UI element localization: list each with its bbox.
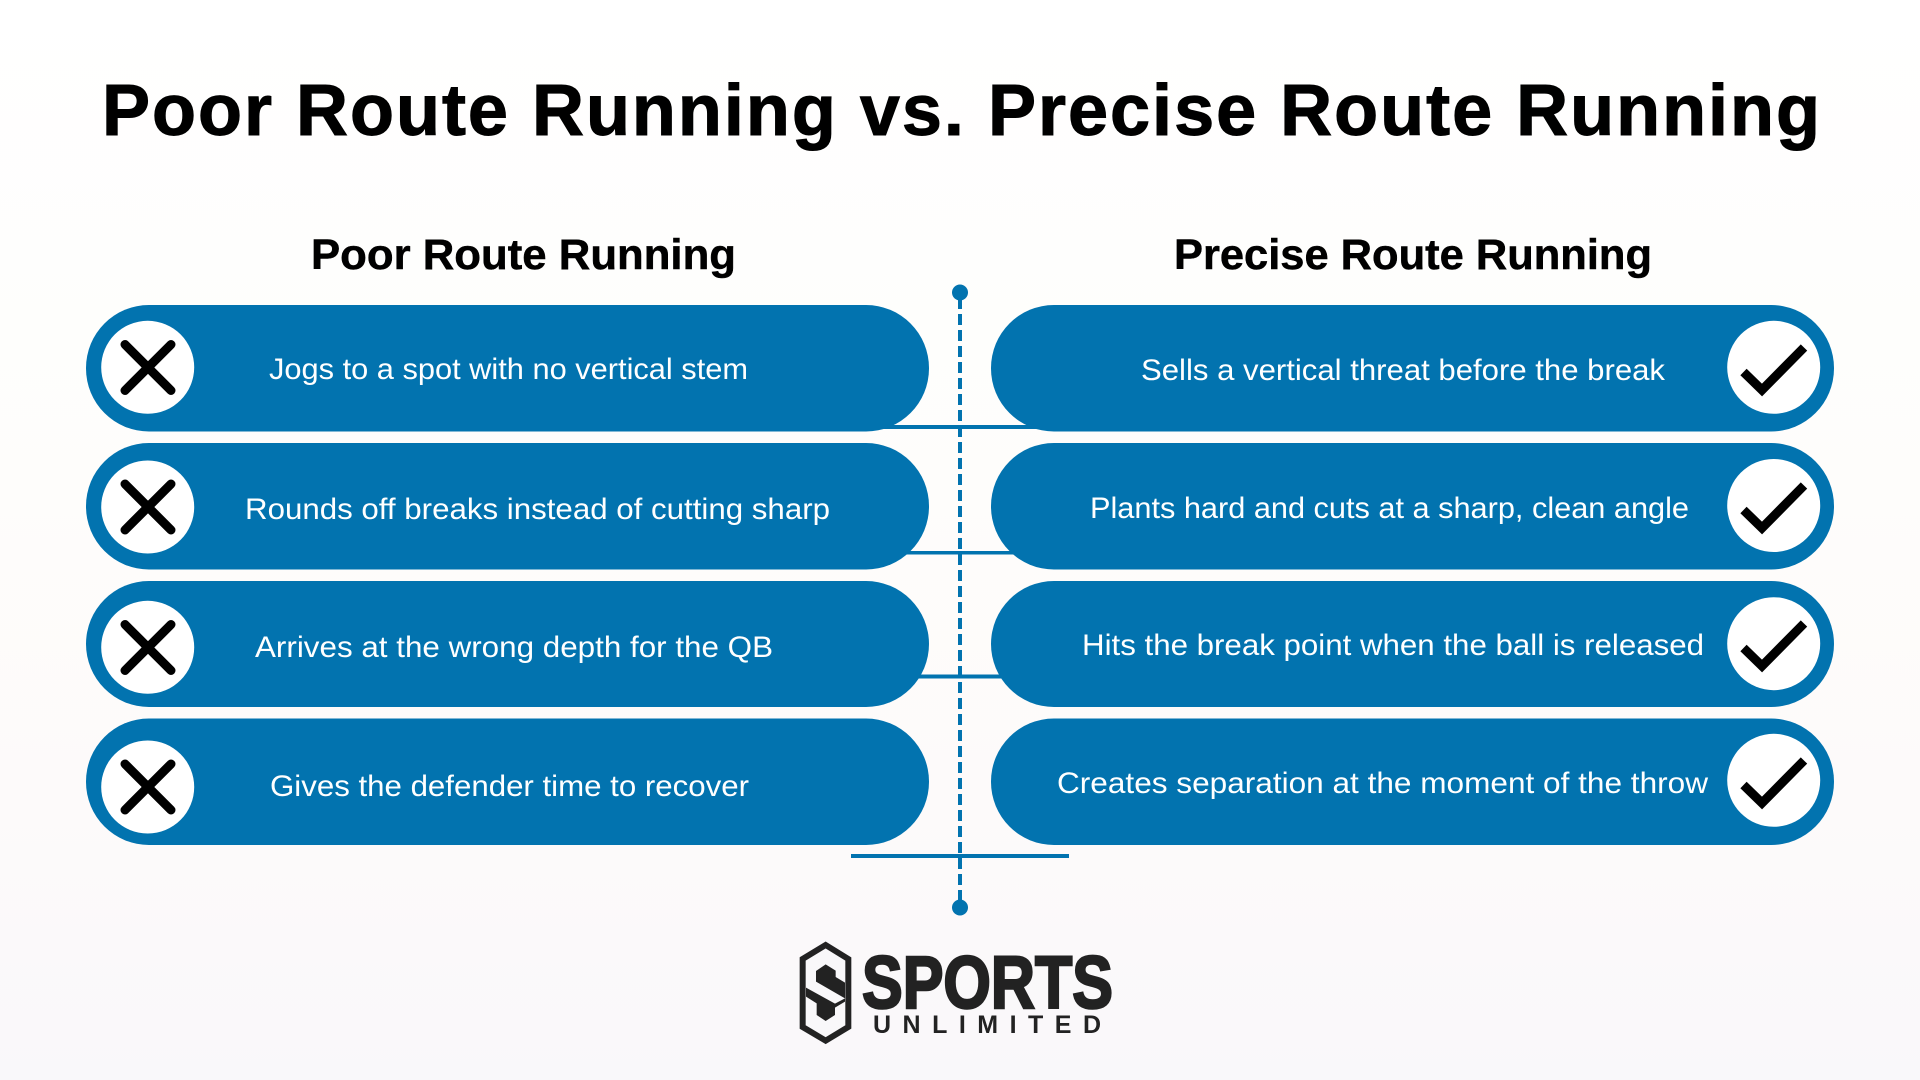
icon: cross [125, 484, 171, 530]
icon: cross [125, 764, 171, 810]
logo: sports unlimited: UNLIMITED [873, 1011, 1101, 1039]
title: Poor Route Running vs. Precise Route Running [102, 71, 1822, 151]
panel: precise route row 1: Sells a vertical threat before the break [1141, 354, 1666, 387]
logo: sports unlimited: SPORTS [862, 941, 1113, 1024]
panel: precise route row 3: Hits the break point when the ball is released [1082, 629, 1704, 662]
heading: poor route running: Poor Route Running [311, 231, 736, 279]
icon: check [1744, 624, 1804, 666]
icon: check [1744, 760, 1804, 803]
panel: poor route row 3 [86, 581, 929, 707]
icon: check [1744, 486, 1804, 528]
panel: poor route row 4 [86, 718, 929, 845]
panel: precise route row 4: Creates separation at the moment of the throw [1057, 767, 1708, 800]
panel: precise route row 3 [991, 581, 1834, 707]
logo: sports unlimited [803, 941, 1113, 1041]
icon: cross [125, 624, 171, 670]
panel: poor route row 4: Gives the defender time to recover [270, 770, 749, 803]
panel: poor route row 2 [86, 443, 929, 570]
panel: precise route row 4 [991, 718, 1834, 845]
panel: poor route row 3: Arrives at the wrong depth for the QB [255, 631, 773, 664]
panel: poor route row 1 [86, 305, 929, 432]
icon: check [1744, 348, 1804, 390]
heading: precise route running: Precise Route Running [1174, 231, 1652, 279]
panel: poor route row 2: Rounds off breaks instead of cutting sharp [245, 493, 830, 526]
panel: precise route row 1 [991, 305, 1834, 432]
icon: cross [125, 344, 171, 390]
panel: precise route row 2 [991, 443, 1834, 570]
icon: hexagon S mark [803, 945, 848, 1041]
panel: precise route row 2: Plants hard and cuts at a sharp, clean angle [1090, 492, 1689, 525]
panel: poor route row 1: Jogs to a spot with no vertical stem [269, 353, 748, 386]
center timeline [851, 284, 1069, 916]
